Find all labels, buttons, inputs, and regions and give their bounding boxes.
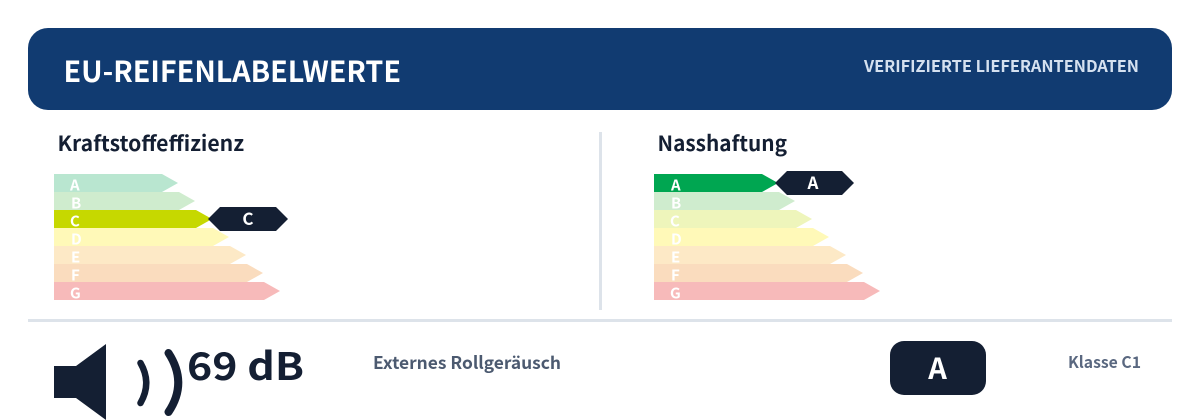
rating bars: wet grip: B xyxy=(671,192,681,214)
rating bars: fuel efficiency: F xyxy=(71,264,80,286)
rating bars: wet grip: C xyxy=(670,210,680,232)
heading: Kraftstoffeffizienz: Kraftstoffeffizienz xyxy=(58,128,244,158)
rating marker: C: C xyxy=(242,205,254,230)
rating bars: wet grip: F xyxy=(671,264,680,286)
header banner xyxy=(28,28,1172,110)
panel: noise xyxy=(54,336,1141,420)
title: EU-REIFENLABELWERTE xyxy=(64,49,401,91)
rating bars: wet grip: E xyxy=(671,246,680,268)
rating marker: A xyxy=(775,169,854,195)
noise class badge: A xyxy=(927,346,947,388)
rating bars: wet grip: D xyxy=(671,228,682,250)
divider above noise row xyxy=(28,319,1172,322)
icon: speaker with sound waves xyxy=(54,344,178,420)
rating bars: fuel efficiency: D xyxy=(71,228,82,250)
rating marker: A: A xyxy=(807,169,819,194)
divider between panels xyxy=(599,132,602,310)
rating bars: fuel efficiency: E xyxy=(71,246,80,268)
rating bars: fuel efficiency: C xyxy=(70,210,80,232)
rating bars: fuel efficiency: G xyxy=(70,282,81,304)
noise value: 69 dB xyxy=(187,336,304,391)
noise class badge xyxy=(890,341,986,395)
heading: Nasshaftung: Nasshaftung xyxy=(658,128,787,158)
noise label: Externes Rollgeräusch xyxy=(373,349,561,374)
rating bars: fuel efficiency xyxy=(54,174,280,304)
rating bars: wet grip: A xyxy=(670,174,681,196)
panel: Nasshaftung xyxy=(654,128,880,304)
rating bars: fuel efficiency: A xyxy=(69,174,80,196)
rating bars: wet grip: G xyxy=(670,282,681,304)
tyre class label: Klasse C1 xyxy=(1068,349,1141,373)
rating bars: wet grip xyxy=(654,174,880,304)
panel: Kraftstoffeffizienz xyxy=(54,128,288,304)
rating marker: C xyxy=(208,205,288,231)
rating bars: fuel efficiency: B xyxy=(71,192,81,214)
header subtitle: VERIFIZIERTE LIEFERANTENDATEN xyxy=(863,53,1139,77)
